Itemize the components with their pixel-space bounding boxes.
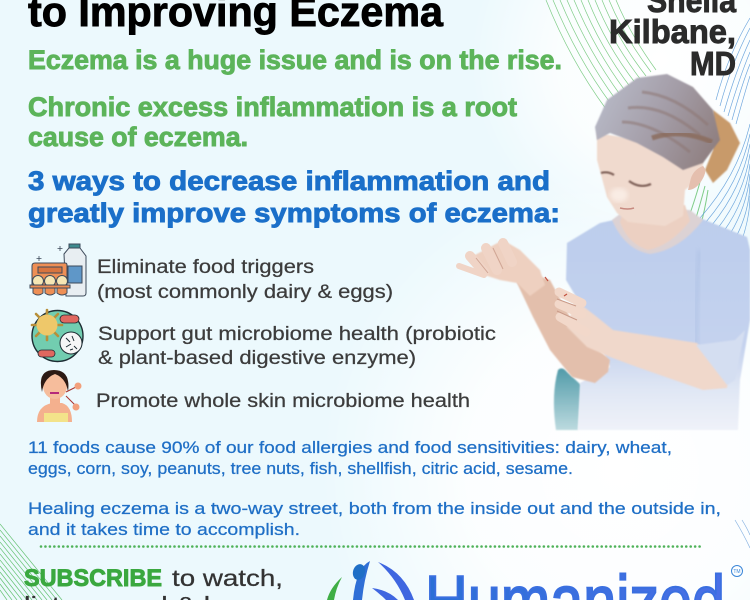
heading: root cause: cause of eczema.: [28, 122, 248, 152]
author name: [609, 0, 737, 82]
icon: gut microbiome: [32, 310, 83, 362]
list item: gut health: [98, 324, 496, 369]
icon: woman skin care: [37, 370, 82, 422]
text block: food allergies: 11 foods cause 90% of our food allergies and food sensitivities: dairy, wheat,: [28, 439, 672, 457]
list item: gut health: Support gut microbiome health (probiotic: [98, 324, 496, 345]
call to action: to watch,: [172, 565, 283, 591]
text block: healing: Healing eczema is a two-way street, both from the inside out and the outside in,: [28, 500, 721, 518]
heading: root cause: Chronic excess inflammation is a root: [28, 92, 517, 122]
list item: food triggers: (most commonly dairy & eggs): [97, 282, 393, 303]
text block: food allergies: eggs, corn, soy, peanuts, tree nuts, fish, shellfish, citric acid, sesame.: [28, 460, 573, 478]
list item: food triggers: [97, 257, 393, 303]
line pattern: top right green: [546, 0, 708, 232]
line pattern: bottom left green: [0, 524, 62, 600]
text block: food allergies: [28, 439, 672, 478]
logo: Humanized: TM: [733, 569, 741, 575]
heading: three ways: [28, 166, 560, 228]
heading: three ways: 3 ways to decrease inflammation and: [28, 166, 550, 196]
text block: healing: [28, 500, 721, 539]
author name: MD: [690, 45, 736, 82]
icon: eggs and milk: [30, 244, 86, 296]
line pattern: right blue: [700, 18, 750, 240]
heading: three ways: greatly improve symptoms of eczema:: [28, 198, 560, 228]
heading: root cause: [28, 92, 517, 152]
line pattern: bottom right: [735, 520, 750, 548]
list item: gut health: & plant-based digestive enzyme): [98, 348, 416, 369]
author name: Kilbane,: [609, 13, 736, 50]
call to action: [24, 565, 283, 600]
call to action: SUBSCRIBE: [24, 565, 162, 592]
photo: girl scratching arm: [459, 74, 750, 430]
heading: eczema rising: Eczema is a huge issue and is on the rise.: [28, 45, 562, 75]
text block: healing: and it takes time to accomplish.: [28, 521, 300, 539]
list item: food triggers: Eliminate food triggers: [97, 257, 314, 278]
dotted divider: [41, 545, 704, 548]
list item: skin health: Promote whole skin microbiome health: [96, 391, 470, 412]
